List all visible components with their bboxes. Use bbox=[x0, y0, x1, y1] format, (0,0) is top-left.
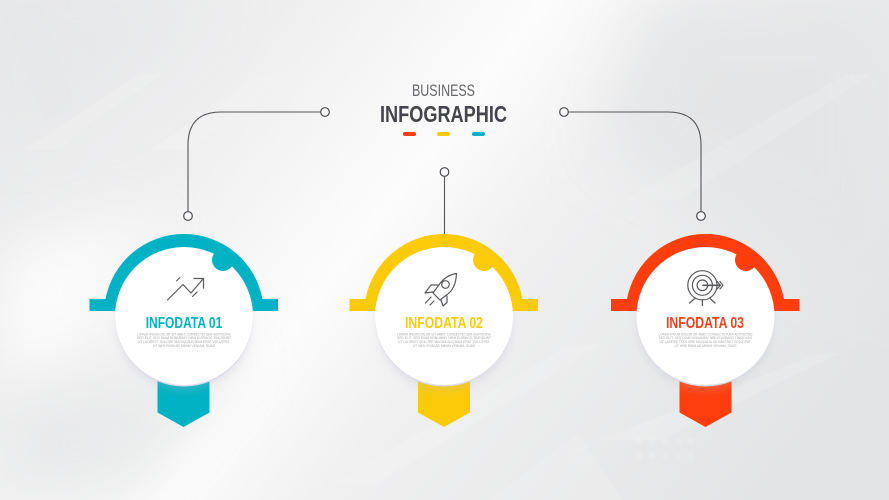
heading: business: BUSINESS bbox=[412, 81, 475, 100]
arc: teal bbox=[90, 234, 278, 311]
body text bbox=[397, 332, 491, 348]
circle: white disc bbox=[375, 247, 513, 389]
body text: LOREM IPSUM DOLOR SIT AMET, CONSECTETUER ADIPISCING bbox=[137, 332, 231, 336]
tag: red pointer bbox=[680, 378, 732, 427]
connector: middle bbox=[440, 168, 449, 236]
body text: UT WISI ENIM AD MINIM VENIAM, SUAS bbox=[674, 344, 737, 348]
heading: INFODATA 02 bbox=[405, 315, 483, 332]
heading: INFODATA 01 bbox=[146, 315, 223, 332]
tag: yellow pointer bbox=[418, 378, 470, 427]
panel: infodata 02 bbox=[350, 234, 538, 427]
colour dashes bbox=[403, 132, 485, 136]
body text bbox=[137, 332, 231, 348]
body text: UT LAOREET DOLORE MAGNA ALIQUAM ERAT VOLUTPAT. bbox=[398, 340, 490, 344]
icon: target bbox=[688, 271, 723, 306]
decorative dots bbox=[187, 426, 694, 462]
body text: UT WISI ENIM AD MINIM VENIAM, SUAS bbox=[153, 344, 216, 348]
connector: left bbox=[184, 108, 329, 220]
heading: infographic: INFOGRAPHIC bbox=[380, 101, 507, 127]
body text: LOREM IPSUM DOLOR SIT AMET, CONSECTETUER ADIPISCING bbox=[397, 332, 491, 336]
body text: SED ELIT, SED DIAM NONUMMY NIBH EUISMOD TINCIDUNT bbox=[397, 336, 491, 340]
connector: right bbox=[560, 108, 705, 220]
body text: LOREM IPSUM DOLOR SIT AMET, CONSECTETUER ADIPISCING bbox=[658, 332, 753, 336]
body text: SED ELIT, SED DIAM NONUMMY NIBH EUISMOD TINCIDUNT bbox=[137, 336, 231, 340]
arc: red bbox=[611, 234, 800, 311]
body text bbox=[658, 332, 753, 348]
body text: UT LAOREET DOLORE MAGNA ALIQUAM ERAT VOLUTPAT. bbox=[660, 340, 752, 344]
title bbox=[380, 81, 507, 136]
panel: infodata 03 bbox=[611, 234, 800, 427]
circle: white disc bbox=[115, 247, 253, 389]
body text: UT LAOREET DOLORE MAGNA ALIQUAM ERAT VOLUTPAT. bbox=[138, 340, 230, 344]
body text: UT WISI ENIM AD MINIM VENIAM, SUAS bbox=[413, 344, 476, 348]
circle: white disc bbox=[636, 247, 774, 389]
arc: yellow bbox=[350, 234, 538, 311]
heading: INFODATA 03 bbox=[666, 315, 744, 332]
tag: teal pointer bbox=[158, 378, 210, 427]
icon: growth arrow bbox=[168, 278, 204, 300]
icon: rocket bbox=[425, 274, 456, 306]
body text: SED ELIT, SED DIAM NONUMMY NIBH EUISMOD TINCIDUNT bbox=[658, 336, 752, 340]
panel: infodata 01 bbox=[90, 234, 278, 427]
